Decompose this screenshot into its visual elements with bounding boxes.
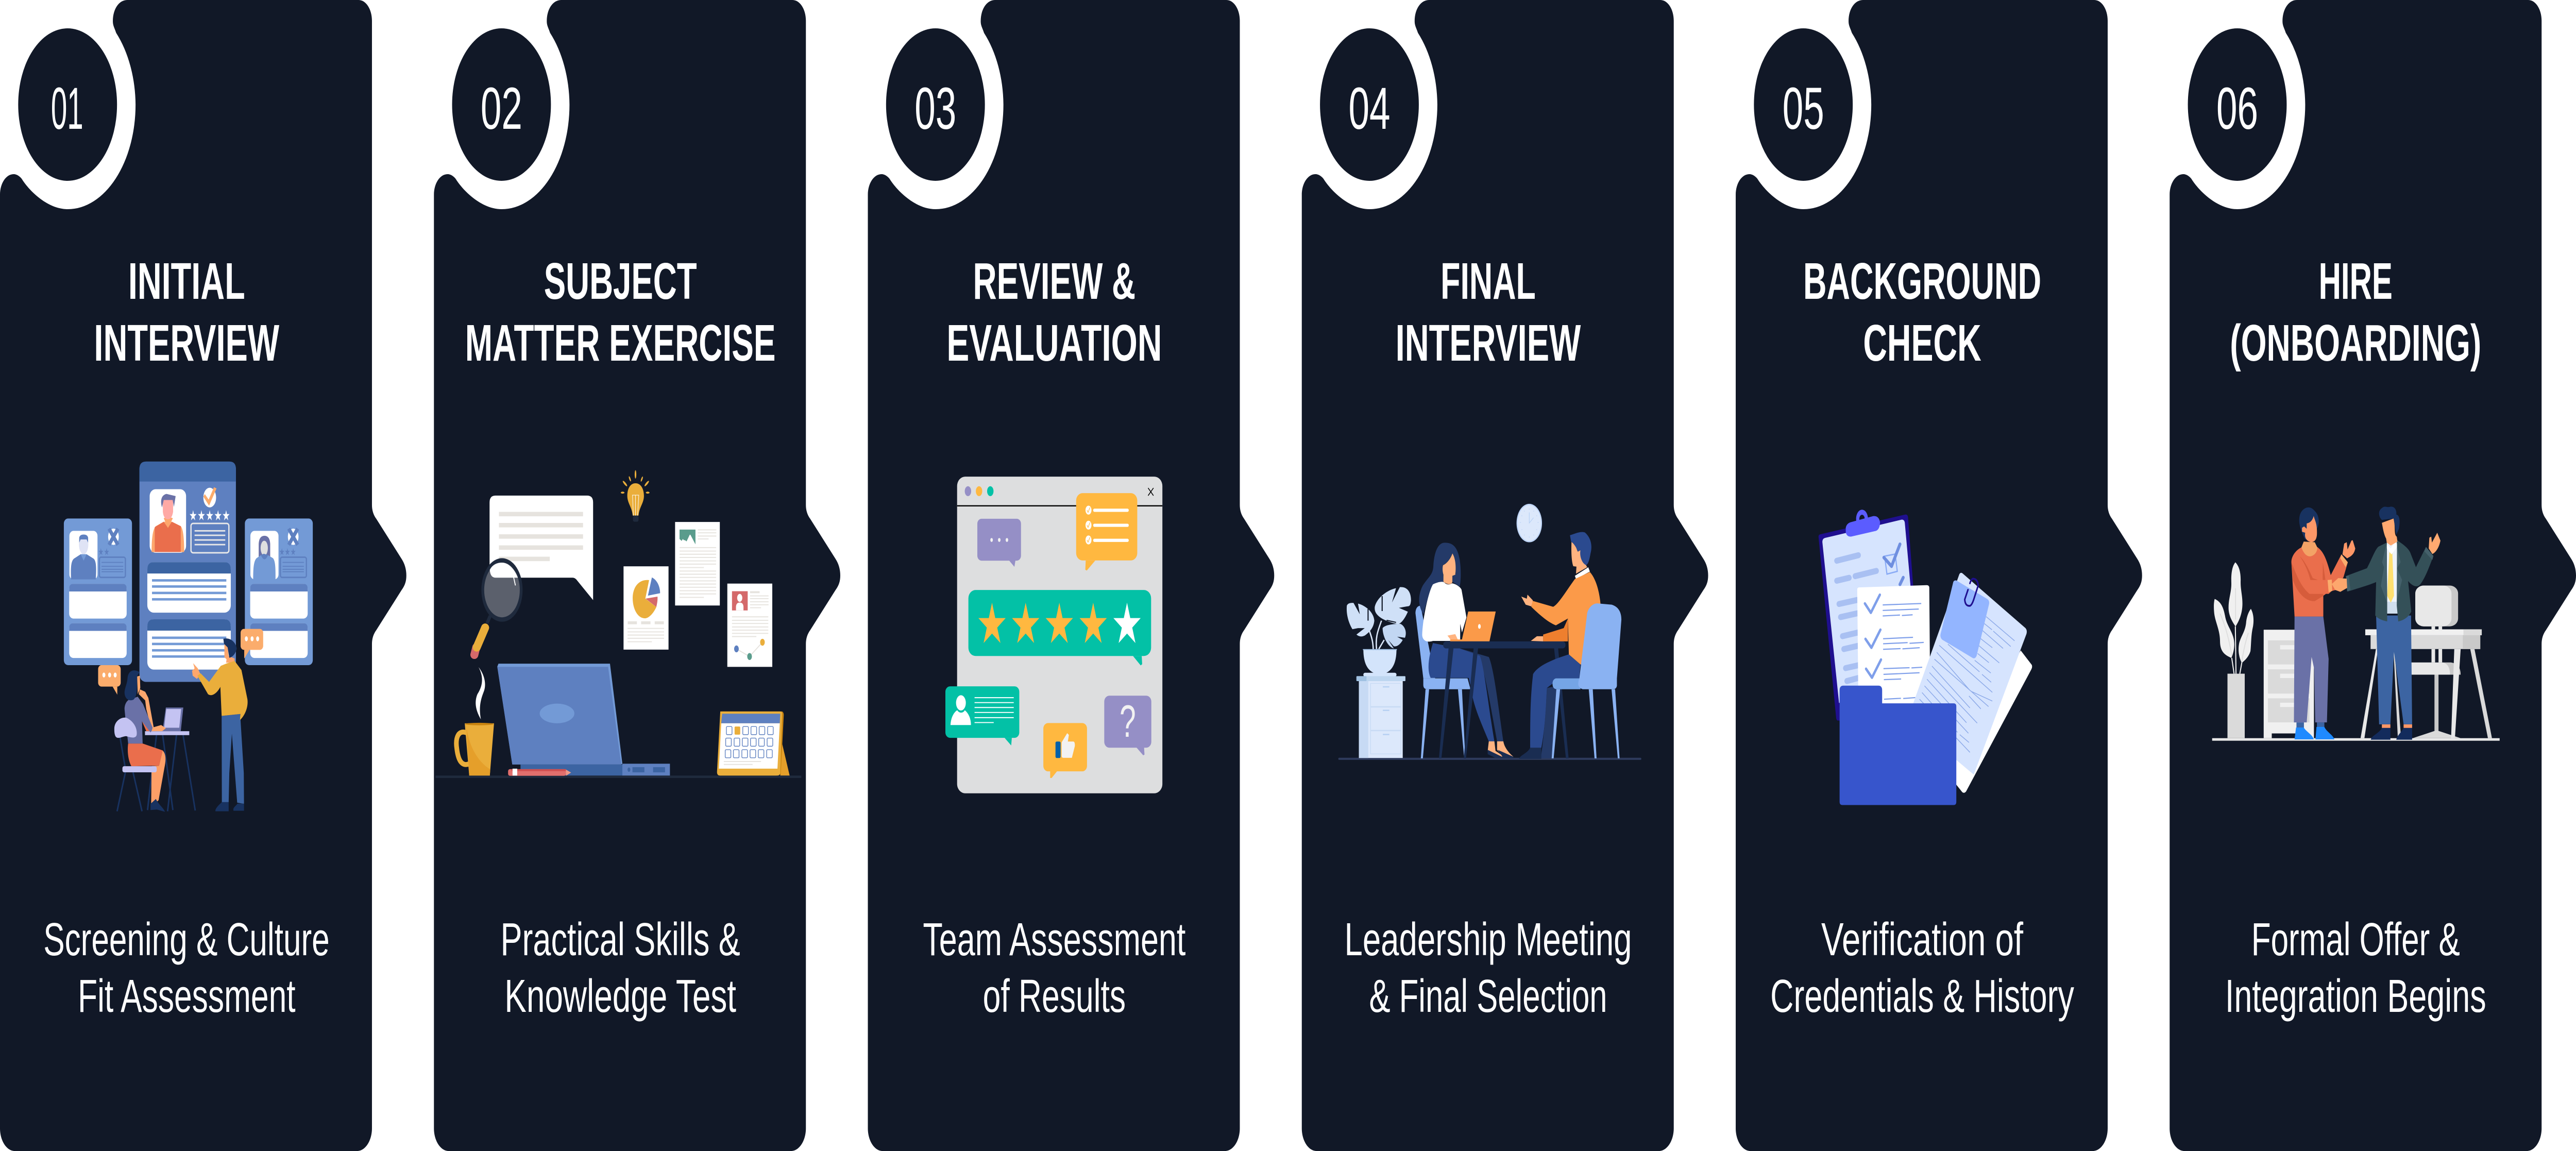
thumbs up bubble (1043, 723, 1087, 778)
shelf line (435, 775, 801, 778)
heading: REVIEW & (973, 252, 1136, 310)
document with image (675, 522, 720, 605)
illustration: handshake in an office (2212, 506, 2500, 741)
clipboard (1819, 510, 1923, 721)
description: Verification of (1821, 913, 2024, 966)
heading (946, 252, 1162, 371)
star rating bubble (969, 590, 1151, 665)
step number badge: 01 (51, 75, 83, 142)
tilted document (1908, 573, 2027, 775)
step number badge (1754, 28, 1853, 181)
step number badge: 05 (1783, 75, 1824, 142)
message bubble (977, 519, 1021, 567)
question bubble (1104, 696, 1151, 755)
heading (1396, 252, 1581, 371)
step number badge (18, 28, 117, 181)
man seated on chair (1519, 532, 1621, 759)
description: Knowledge Test (504, 970, 736, 1022)
desk and laptop (145, 707, 195, 811)
centre candidate card (140, 462, 236, 682)
step number badge: 02 (481, 75, 522, 142)
step number badge (452, 28, 551, 181)
laptop (497, 664, 670, 775)
right candidate card (245, 518, 313, 665)
sticky note and paper clip (1940, 579, 1989, 658)
illustration: two people at a table (1338, 504, 1641, 760)
description (923, 913, 1185, 1022)
description (2225, 913, 2486, 1022)
question bubble: ? (1120, 696, 1136, 747)
heading: SUBJECT (544, 252, 697, 310)
panel: step 05 background check (1736, 0, 2142, 1151)
card shape (868, 0, 1274, 1151)
description (1345, 913, 1632, 1022)
wall clock (1517, 504, 1542, 543)
heading (2230, 252, 2481, 371)
panel: step 04 final interview (1302, 0, 1708, 1151)
panel: step 02 subject matter exercise (434, 0, 840, 1151)
description: & Final Selection (1369, 970, 1607, 1022)
filing cabinet (2264, 630, 2314, 738)
woman seated with laptop (1415, 543, 1513, 758)
description: Screening & Culture (43, 913, 330, 966)
back white sheet (1948, 650, 2032, 793)
heading (465, 252, 776, 371)
description: Team Assessment (923, 913, 1185, 966)
step number badge: 03 (914, 75, 956, 142)
light bulb (621, 470, 650, 522)
heading: INTERVIEW (1396, 314, 1581, 371)
step number badge (1320, 28, 1419, 181)
profile comment bubble (945, 686, 1019, 746)
folder (1840, 686, 1956, 805)
seated woman on chair (114, 670, 166, 812)
browser window (957, 477, 1162, 793)
man in suit (2332, 506, 2441, 740)
floor (2212, 738, 2500, 741)
card shape (0, 0, 406, 1151)
step number badge: 04 (1348, 75, 1391, 142)
panel: step 01 initial interview (0, 0, 406, 1151)
illustration: review window with ratings (945, 477, 1162, 793)
speech bubbles (98, 629, 263, 695)
heading: INTERVIEW (94, 314, 279, 371)
heading: BACKGROUND (1803, 252, 2041, 310)
standing man (192, 638, 248, 811)
magnifying glass (474, 558, 522, 655)
desk calendar (717, 712, 790, 775)
coffee mug with steam (456, 667, 494, 775)
heading (94, 252, 279, 371)
heading: INITIAL (128, 252, 245, 310)
table (1439, 641, 1569, 758)
description (500, 913, 740, 1022)
document with pie chart (623, 566, 669, 650)
panel: step 03 review and evaluation (868, 0, 1274, 1151)
checklist page (1857, 585, 1930, 705)
heading: MATTER EXERCISE (465, 314, 776, 371)
illustration: desk with laptop, documents and ideas (435, 470, 801, 778)
description: Fit Assessment (78, 970, 296, 1022)
card shape (1736, 0, 2142, 1151)
panel: step 06 hire onboarding (2170, 0, 2576, 1151)
potted plant on cabinet (1347, 587, 1411, 758)
step number badge: 06 (2216, 75, 2258, 142)
pencil (508, 769, 571, 776)
description: Integration Begins (2225, 970, 2486, 1022)
heading: CHECK (1863, 314, 1981, 371)
heading: (ONBOARDING) (2230, 314, 2481, 371)
card shape (2170, 0, 2576, 1151)
man in orange sweater (2292, 507, 2355, 739)
left candidate card (64, 518, 132, 665)
heading: EVALUATION (946, 314, 1162, 371)
desk and office chair (2361, 586, 2492, 738)
floor (1338, 758, 1641, 760)
description: Credentials & History (1770, 970, 2074, 1022)
card shape (434, 0, 840, 1151)
illustration: candidate profiles and interviewers (64, 462, 313, 812)
plant in vase (2214, 562, 2253, 738)
description: Practical Skills & (500, 913, 740, 966)
description (1770, 913, 2074, 1022)
heading (1803, 252, 2041, 371)
document with profile and chart (727, 584, 772, 667)
heading: FINAL (1440, 252, 1536, 310)
speech bubble (489, 496, 593, 600)
description (43, 913, 330, 1022)
illustration: documents in a folder (1819, 510, 2032, 805)
card shape (1302, 0, 1708, 1151)
step number badge (886, 28, 985, 181)
heading: HIRE (2319, 252, 2393, 310)
step number badge (2188, 28, 2286, 181)
checklist bubble (1076, 493, 1137, 570)
description: Formal Offer & (2251, 913, 2460, 966)
description: Leadership Meeting (1345, 913, 1632, 966)
description: of Results (983, 970, 1126, 1022)
